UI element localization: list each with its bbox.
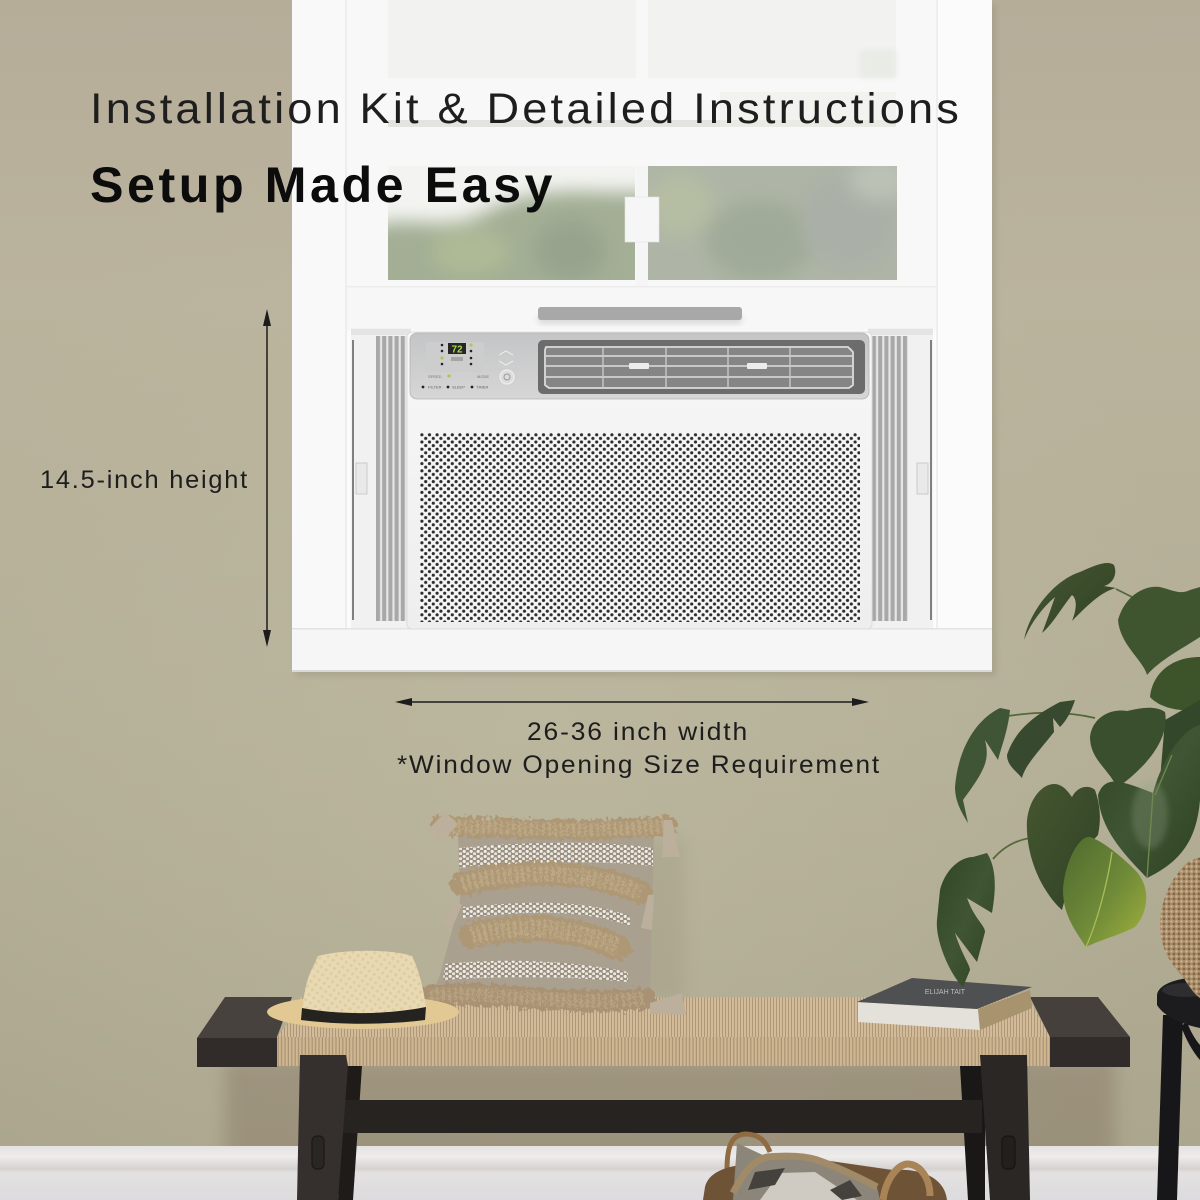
pillow bead rows [443,843,653,982]
front leg: right [980,1055,1030,1200]
leaf: top left [1024,563,1116,640]
window latch [625,166,659,288]
AC body [407,332,872,629]
basket handle [727,1134,770,1170]
rear legs [338,1066,985,1200]
hat brim [267,995,459,1029]
seat end: left [197,997,292,1067]
height dimension arrow [263,309,271,647]
woven seat front [277,1037,1050,1066]
AC control panel: FILTER [428,384,442,390]
leaf: large right background [1160,700,1200,790]
book page edge [978,990,1032,1030]
AC control panel: TIMER [476,384,489,390]
cushion [733,1143,880,1200]
leaf: yellow green [1063,837,1146,947]
AC front grille [420,433,860,622]
side curtain: left [351,328,411,628]
book cover [857,978,1032,1009]
baseboard [0,1146,1200,1200]
pillow body [430,835,654,1000]
leaf: center dark [1090,708,1166,788]
pillow tassels [428,812,686,1015]
book pages [858,1002,980,1030]
woven seat top [277,997,1050,1037]
basket with cushion [703,1134,947,1200]
AC control panel: 72 [451,344,463,356]
fringed pillow [428,812,686,1015]
height label: 14.5-inch height [40,466,249,494]
width dimension arrow [395,698,869,706]
seat end: right [1030,997,1130,1067]
title: line two: Setup Made Easy [90,157,556,213]
seat end shading [197,1037,1130,1067]
front leg: left [297,1055,348,1200]
AC control panel: SPEED [428,374,442,379]
pillow fringe highlights [430,826,668,1001]
leaf: right [1150,657,1200,710]
side curtain: right [868,328,933,628]
window sash rail [347,286,936,330]
monstera plant [937,563,1200,987]
leaf: middle [1027,784,1100,910]
lower window pane: left [388,171,635,280]
lower window pane: right [648,166,897,280]
window [292,0,996,676]
book cover: ELIJAH TAIT [925,989,966,996]
basket [703,1160,947,1200]
leaf: left upper [1007,700,1075,778]
AC control panel [410,333,869,399]
plant pot [1160,857,1200,998]
pillow fringe bands [430,826,668,1001]
bench crossbar [342,1100,982,1133]
leaf: top right [1118,587,1200,675]
stool [1157,977,1200,1200]
leaf: bottom left [937,853,995,987]
window handle [538,307,742,324]
straw hat [267,951,459,1029]
air conditioner unit [407,332,872,629]
window side casing [292,0,992,628]
plant stems [993,589,1132,859]
leaf: large glossy [1098,725,1200,878]
hat crown [302,951,426,1018]
AC air vent [538,340,865,394]
upper window pane [347,0,936,288]
width label: 26-36 inch width [527,718,749,746]
window sill [292,628,992,672]
title: line one: Installation Kit & Detailed Instructions [90,85,962,133]
book [857,978,1032,1030]
bench [197,997,1130,1200]
window size requirement note: *Window Opening Size Requirement [397,751,881,779]
basket rim handle [883,1164,930,1200]
AC control panel: SLEEP [452,384,465,390]
hat band [301,1007,426,1024]
AC control panel: MODE [477,374,489,379]
shadow under bench [225,1060,1115,1170]
leaf: far left [955,708,1010,823]
pillow shadow [480,840,685,1000]
